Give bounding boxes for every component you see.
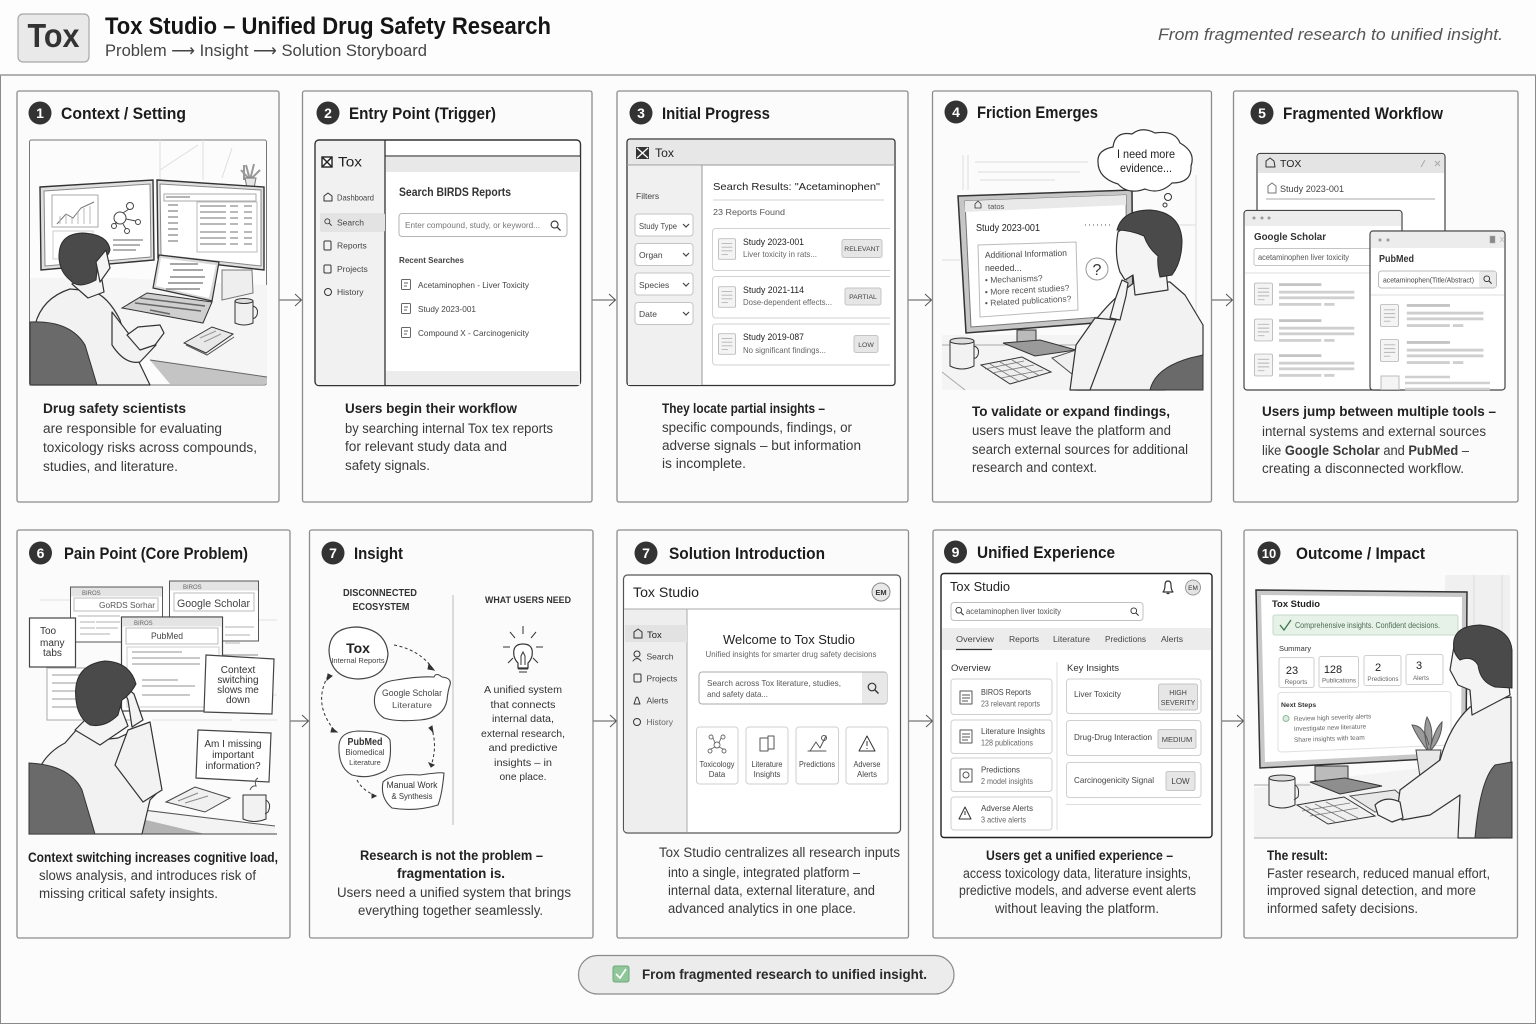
window: Tox: Study 2023-001 — [1280, 184, 1344, 195]
description — [659, 845, 900, 916]
description: Users get a unified experience – — [986, 848, 1173, 863]
next steps: Next Steps — [1281, 702, 1316, 709]
summary stat tiles: 128 — [1324, 664, 1342, 676]
badge 9 — [944, 540, 967, 564]
badge 2: 2 — [324, 105, 332, 121]
description: like Google Scholar and PubMed – — [1262, 443, 1469, 458]
filters: Study Type — [639, 221, 677, 231]
window: PubMed: BIROS — [134, 621, 153, 627]
description: Users need a unified system that brings — [337, 885, 571, 900]
window: Google Scholar — [170, 581, 258, 655]
thought bubble: I need more — [1117, 147, 1175, 161]
arrow: 7 to 8 — [593, 715, 616, 727]
node: PubMed: Biomedical — [345, 748, 385, 757]
badge 7: 7 — [329, 545, 337, 561]
tabs: Reports — [1009, 634, 1039, 644]
note: missing information — [196, 730, 271, 782]
heading: Initial Progress — [662, 105, 770, 123]
badge 10: 10 — [1262, 546, 1276, 561]
search form: Enter compound, study, or keyword... — [405, 220, 540, 230]
description — [43, 401, 257, 474]
result rows: Dose-dependent effects... — [743, 297, 832, 307]
window: Google: GoRDS Sorhar — [99, 600, 155, 610]
next steps: Share insights with team — [1294, 735, 1365, 744]
node: Google Scholar: Google Scholar — [382, 688, 442, 698]
heading: Insight — [354, 545, 403, 563]
node: Manual Work — [382, 773, 444, 809]
summary stat tiles: 3 — [1416, 660, 1422, 672]
tabs: Alerts — [1161, 634, 1183, 644]
disconnected ecosystem diagram: DISCONNECTED — [343, 588, 417, 599]
app mockup: unified dashboard: Overview — [951, 663, 991, 674]
result rows: No significant findings... — [743, 345, 826, 355]
overview cards: Adverse Alerts — [981, 803, 1033, 813]
next steps: Review high severity alerts — [1294, 713, 1372, 723]
badge 3 — [630, 102, 652, 124]
filters — [635, 191, 693, 324]
arrow: 8 to 9 — [908, 715, 932, 727]
badge 2 — [316, 102, 340, 124]
badge 9: 9 — [952, 544, 960, 560]
heading: Context / Setting — [61, 105, 186, 123]
app mockup: welcome screen: Unified insights for smarter drug safety decisions — [706, 650, 876, 659]
what users need: external research, — [481, 728, 565, 740]
description: everything together seamlessly. — [358, 903, 543, 918]
search box: Search across Tox literature, studies, — [707, 678, 841, 688]
arrow: 4 to 5 — [1212, 294, 1232, 306]
window: Google Scholar: BIROS — [183, 585, 202, 591]
description: Users jump between multiple tools – — [1262, 404, 1496, 419]
note: missing information: important — [212, 750, 254, 761]
avatar — [872, 583, 890, 601]
tile: literature insights: Insights — [754, 770, 781, 779]
missing info note: • Related publications? — [985, 293, 1072, 308]
key insight cards: LOW — [1171, 777, 1190, 786]
description: Tox Studio centralizes all research inputs — [659, 845, 900, 860]
description: advanced analytics in one place. — [668, 901, 856, 916]
what users need: A unified system — [484, 684, 562, 696]
missing info note: • More recent studies? — [985, 283, 1070, 297]
summary stat tiles: Publications — [1322, 678, 1356, 684]
tile: predictions — [796, 727, 838, 784]
arrow: 3 to 4 — [908, 294, 932, 306]
heading: Pain Point (Core Problem) — [64, 545, 248, 563]
what users need: insights – in — [494, 757, 552, 769]
node: Tox: Tox — [346, 640, 370, 656]
badge 6 — [29, 542, 52, 564]
note: too many tabs: tabs — [43, 648, 62, 659]
panel: friction emerges — [932, 91, 1212, 502]
overview cards: Predictions — [981, 764, 1020, 774]
tile: adverse alerts — [846, 727, 888, 784]
sidebar nav: Alerts — [646, 696, 668, 706]
node: Manual Work: Manual Work — [386, 780, 438, 790]
filters: Date — [639, 309, 657, 319]
tile: adverse alerts: Alerts — [857, 770, 877, 779]
tabs: Overview — [956, 634, 995, 644]
tabs — [942, 628, 1211, 650]
overview cards: 128 publications — [981, 738, 1033, 748]
description: informed safety decisions. — [1267, 901, 1418, 916]
recent searches: Acetaminophen - Liver Toxicity — [418, 280, 530, 290]
description: for relevant study data and — [345, 439, 507, 454]
tile: predictions: Predictions — [799, 760, 835, 769]
avatar: EM — [875, 588, 887, 597]
recent searches: Compound X - Carcinogenicity — [418, 328, 530, 338]
description: missing critical safety insights. — [39, 886, 218, 901]
description — [959, 848, 1196, 916]
tile: toxicology data: Data — [709, 770, 726, 779]
description — [337, 848, 571, 918]
description: safety signals. — [345, 458, 430, 473]
illustration: scientist needing more evidence — [942, 130, 1203, 390]
description: specific compounds, findings, or — [662, 420, 852, 435]
key insight cards: Drug-Drug Interaction — [1074, 732, 1152, 742]
arrow: 9 to 10 — [1222, 715, 1244, 727]
note: missing information: Am I missing — [204, 739, 262, 750]
description — [1267, 848, 1490, 916]
overview cards — [951, 679, 1052, 830]
description: fragmentation is. — [397, 866, 505, 881]
app mockup: unified dashboard: Key Insights — [1067, 663, 1119, 674]
badge 1: 1 — [36, 105, 44, 121]
illustration: confident scientist with dashboard: Summary — [1279, 644, 1311, 653]
node: Tox — [329, 627, 388, 679]
sidebar nav: Projects — [337, 264, 368, 274]
overview cards: Literature Insights — [981, 726, 1045, 736]
arrow: 6 to 7 — [290, 715, 308, 727]
what users need: and predictive — [488, 742, 558, 754]
overview cards: 3 active alerts — [981, 816, 1026, 824]
description: To validate or expand findings, — [972, 404, 1170, 419]
note: context switching: down — [226, 695, 250, 706]
header — [0, 0, 1536, 75]
next steps — [1278, 692, 1451, 752]
description: Faster research, reduced manual effort, — [1267, 866, 1490, 881]
sidebar nav: Search — [337, 218, 364, 228]
node: Manual Work: & Synthesis — [392, 791, 432, 801]
next steps: Investigate new literature — [1294, 723, 1367, 733]
description — [662, 401, 861, 471]
summary stat tiles: 23 — [1286, 665, 1298, 677]
summary stat tiles: 2 — [1375, 662, 1381, 674]
illustration: scientist needing more evidence: Study 2023-001 — [976, 223, 1040, 234]
missing info note — [978, 242, 1078, 317]
window: PubMed — [1370, 231, 1505, 390]
heading: Outcome / Impact — [1296, 545, 1425, 563]
success banner — [1273, 615, 1458, 635]
search box: acetaminophen liver toxicity — [966, 607, 1061, 616]
app mockup: welcome screen — [624, 575, 900, 833]
badge 5 — [1250, 102, 1274, 124]
footer callout pill: From fragmented research to unified insight. — [642, 967, 927, 982]
arrow: 2 to 3 — [592, 294, 616, 306]
description: predictive models, and adverse event alerts — [959, 883, 1196, 898]
description — [345, 401, 553, 473]
result rows: LOW — [858, 342, 874, 349]
disconnected ecosystem diagram — [322, 588, 450, 809]
result rows: Liver toxicity in rats... — [743, 249, 817, 259]
result rows: RELEVANT — [844, 246, 880, 253]
search box — [951, 602, 1143, 620]
note: context switching: switching — [217, 675, 259, 686]
panel: initial progress — [617, 91, 908, 502]
description: slows analysis, and introduces risk of — [39, 868, 256, 883]
description: They locate partial insights – — [662, 401, 825, 416]
app mockup: search results: Tox — [655, 146, 674, 160]
note: missing information: information? — [205, 761, 261, 772]
description: internal data, external literature, and — [668, 883, 875, 898]
dashed arrows — [322, 645, 434, 796]
search form: Search BIRDS Reports — [399, 187, 511, 199]
description: by searching internal Tox tex reports — [345, 421, 553, 436]
footer callout pill — [578, 956, 954, 994]
heading: Unified Experience — [977, 544, 1115, 562]
results heading: Search Results: "Acetaminophen" — [713, 181, 880, 193]
app mockup: search results: 23 Reports Found — [713, 207, 785, 217]
panel: solution introduction — [617, 530, 908, 938]
search form — [399, 187, 567, 265]
panel: insight — [310, 530, 593, 938]
badge 8: 7 — [642, 545, 650, 561]
summary stat tiles: Alerts — [1413, 675, 1429, 682]
logo: Tox — [28, 17, 80, 54]
overview cards: BIROS Reports — [981, 687, 1031, 697]
illustration: overwhelmed scientist with windows — [29, 581, 277, 834]
note: too many tabs: Too — [40, 626, 57, 637]
thought bubble — [1098, 130, 1192, 207]
app mockup: search reports — [315, 140, 580, 386]
result rows: Study 2019-087 — [743, 332, 804, 343]
tabs: Predictions — [1105, 634, 1146, 644]
badge 1 — [28, 102, 52, 124]
plant — [1412, 717, 1442, 777]
what users need: internal data, — [492, 713, 554, 725]
panel: outcome / impact — [1244, 530, 1518, 938]
node: PubMed — [339, 731, 390, 777]
sidebar nav: Search — [646, 652, 674, 662]
heading: Friction Emerges — [977, 104, 1098, 122]
description: adverse signals – but information — [662, 438, 861, 453]
missing info note: needed... — [985, 263, 1022, 273]
note: too many tabs: many — [40, 638, 64, 649]
window: Google Scholar: acetaminophen liver toxicity — [1258, 253, 1349, 262]
avatar: EM — [1188, 585, 1198, 592]
sidebar nav: History — [646, 717, 674, 727]
node: Google Scholar: Literature — [392, 701, 433, 710]
result rows: Study 2023-001 — [743, 237, 804, 248]
description: are responsible for evaluating — [43, 421, 222, 436]
tabs: Literature — [1053, 634, 1090, 644]
badge 4 — [944, 100, 968, 124]
window: PubMed: acetaminophen(Title/Abstract) — [1383, 276, 1474, 284]
window: Tox — [1257, 154, 1445, 244]
description: research and context. — [972, 460, 1097, 475]
sidebar nav — [625, 625, 687, 727]
sidebar nav: Tox — [647, 630, 662, 641]
welcome heading: Welcome to Tox Studio — [723, 632, 855, 647]
app mockup: unified dashboard — [941, 574, 1212, 838]
window: Tox: TOX — [1280, 158, 1301, 170]
illustration: scientist needing more evidence: tatos — [988, 202, 1005, 211]
description: internal systems and external sources — [1262, 424, 1486, 439]
arrow: 1 to 2 — [279, 294, 302, 306]
icon: bell — [1163, 581, 1173, 594]
heading: Fragmented Workflow — [1283, 105, 1443, 123]
icon: light bulb — [503, 626, 543, 672]
panel: fragmented workflow — [1234, 91, 1518, 502]
key insight cards: HIGH — [1169, 690, 1187, 697]
window: Google Scholar: Google Scholar — [177, 598, 250, 610]
window: Google Scholar: Google Scholar — [1254, 231, 1326, 243]
summary stat tiles: Reports — [1285, 679, 1308, 686]
avatar — [1186, 580, 1200, 595]
key insight cards — [1066, 679, 1201, 804]
description: Context switching increases cognitive load, — [28, 850, 278, 865]
panel: entry point — [302, 91, 592, 502]
tile: toxicology data — [696, 727, 738, 784]
illustration: scientist needing more evidence: ? — [1093, 262, 1102, 279]
overview cards: 23 relevant reports — [981, 700, 1040, 708]
sidebar nav: Reports — [337, 240, 367, 250]
description: Users begin their workflow — [345, 401, 517, 416]
description: improved signal detection, and more — [1267, 883, 1476, 898]
note: context switching: Context — [221, 665, 255, 676]
description: Research is not the problem – — [360, 848, 543, 863]
key insight cards: Liver Toxicity — [1074, 689, 1122, 699]
sidebar nav — [320, 154, 385, 297]
window: PubMed: PubMed — [151, 631, 183, 642]
app mockup: unified dashboard: Tox Studio — [950, 580, 1010, 594]
tile: literature insights — [746, 727, 788, 784]
filters: Species — [639, 280, 669, 290]
note: context switching — [204, 655, 274, 714]
missing info note: • Mechanisms? — [985, 273, 1043, 285]
window: PubMed: PubMed — [1379, 254, 1414, 265]
search form: Recent Searches — [399, 255, 464, 265]
app mockup: search results — [627, 139, 895, 386]
heading: Solution Introduction — [669, 545, 825, 563]
panel: context / setting — [17, 91, 279, 502]
window: Google Scholar — [1244, 210, 1402, 390]
result rows: PARTIAL — [849, 294, 877, 301]
what users need: one place. — [500, 771, 546, 783]
description: access toxicology data, literature insights, — [963, 866, 1191, 881]
description: The result: — [1267, 848, 1328, 863]
node: PubMed: PubMed — [348, 737, 382, 748]
description: search external sources for additional — [972, 442, 1188, 457]
window: Google: BIROS — [82, 591, 101, 597]
success banner: Comprehensive insights. Confident decisions. — [1295, 620, 1440, 630]
tile: literature insights: Literature — [752, 760, 782, 769]
recent searches: Study 2023-001 — [418, 304, 476, 314]
note: context switching: slows me — [217, 685, 259, 696]
description: into a single, integrated platform – — [668, 865, 860, 880]
node: Google Scholar — [374, 674, 450, 721]
tile: adverse alerts: Adverse — [854, 760, 880, 769]
tile: toxicology data: Toxicology — [700, 760, 735, 769]
sidebar nav: History — [337, 287, 364, 297]
result rows: Study 2021-114 — [743, 285, 804, 296]
description — [972, 404, 1188, 475]
thought bubble: evidence... — [1120, 161, 1172, 175]
disconnected ecosystem diagram: ECOSYSTEM — [352, 602, 410, 613]
node: Tox: Internal Reports — [331, 656, 385, 665]
panel: unified experience — [933, 530, 1222, 938]
badge 8 — [634, 542, 658, 564]
panel: pain point — [17, 530, 290, 938]
illustration: scientist at desk with monitors — [30, 140, 267, 385]
node: PubMed: Literature — [349, 758, 381, 767]
illustration: confident scientist with dashboard: Tox Studio — [1272, 599, 1320, 610]
badge 5: 5 — [1258, 105, 1266, 121]
window: Google — [70, 587, 162, 642]
filters: Filters — [636, 191, 659, 201]
sidebar nav: Dashboard — [337, 192, 374, 202]
description: creating a disconnected workflow. — [1262, 461, 1464, 476]
summary stat tiles: Predictions — [1367, 676, 1399, 683]
subtitle: Problem ⟶ Insight ⟶ Solution Storyboard — [105, 41, 427, 60]
badge 3: 3 — [637, 105, 645, 121]
sidebar nav: Tox — [338, 154, 362, 170]
logo — [18, 14, 89, 62]
key insight cards: MEDIUM — [1162, 735, 1192, 744]
key insight cards: SEVERITY — [1161, 700, 1196, 707]
description: Drug safety scientists — [43, 401, 186, 416]
overview cards: 2 model insights — [981, 777, 1033, 786]
tagline: From fragmented research to unified insight. — [1158, 25, 1503, 44]
missing info note: Additional Information — [985, 248, 1067, 260]
app mockup: welcome screen: Tox Studio — [633, 585, 699, 600]
search box: and safety data... — [707, 689, 768, 699]
description — [28, 850, 278, 901]
description — [1262, 404, 1496, 476]
heading: Entry Point (Trigger) — [349, 105, 496, 123]
search box — [699, 672, 887, 704]
key insight cards: Carcinogenicity Signal — [1074, 775, 1154, 785]
description: without leaving the platform. — [994, 901, 1159, 916]
summary stat tiles — [1279, 654, 1443, 688]
what users need: WHAT USERS NEED — [485, 595, 571, 606]
description: users must leave the platform and — [972, 423, 1171, 438]
description: studies, and literature. — [43, 459, 178, 474]
illustration: confident scientist with dashboard — [1254, 575, 1512, 838]
title: Tox Studio – Unified Drug Safety Research — [105, 13, 551, 40]
badge 4: 4 — [952, 104, 960, 120]
badge 6: 6 — [37, 545, 45, 561]
what users need — [481, 595, 571, 783]
note: too many tabs — [30, 618, 76, 667]
description: is incomplete. — [662, 456, 746, 471]
icon: check — [613, 966, 629, 982]
filters: Organ — [639, 250, 663, 260]
window: PubMed — [47, 617, 222, 720]
result rows — [712, 228, 890, 365]
description: toxicology risks across compounds, — [43, 440, 257, 455]
recent searches — [402, 280, 530, 338]
sidebar nav: Projects — [646, 674, 677, 684]
badge 10 — [1258, 542, 1280, 564]
what users need: that connects — [490, 699, 556, 711]
badge 7 — [322, 542, 344, 564]
